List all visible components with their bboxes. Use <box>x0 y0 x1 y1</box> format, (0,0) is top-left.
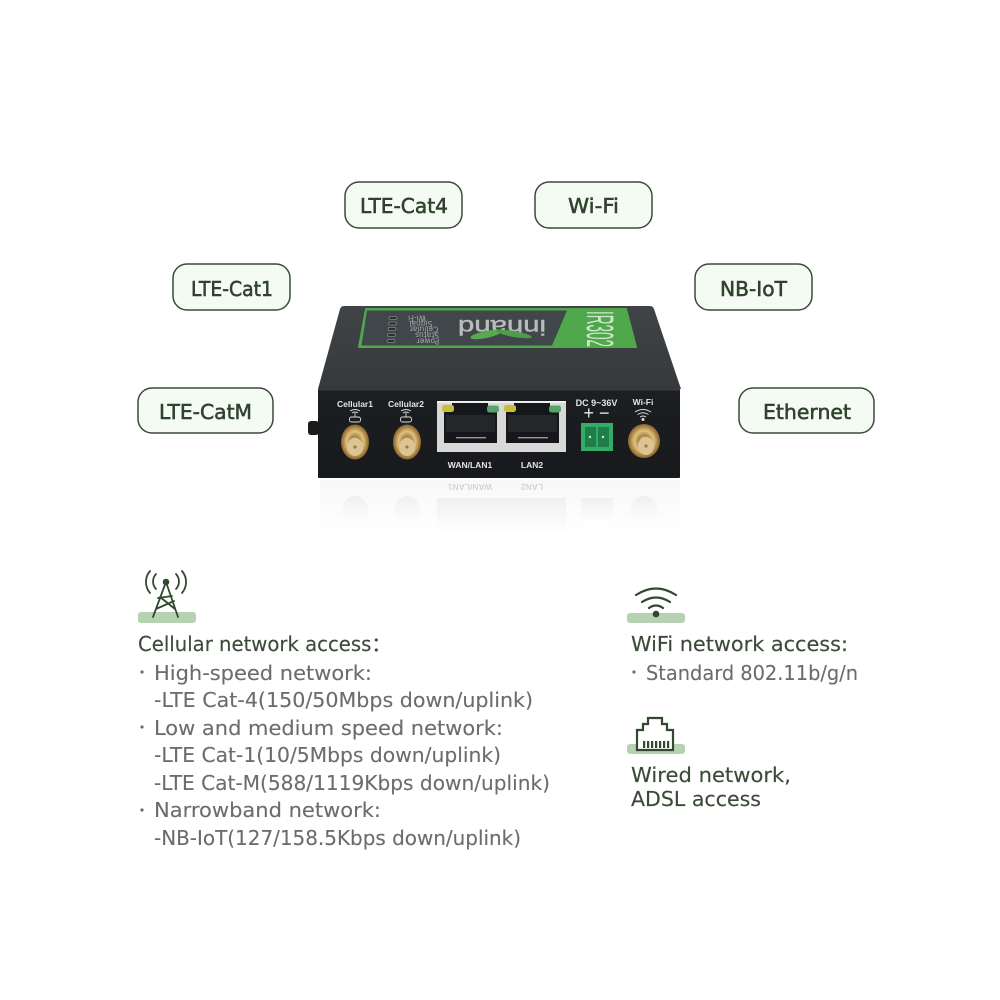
LED labels: Signal <box>409 319 433 328</box>
cellular 2 label: Cellular2 <box>388 399 424 409</box>
pill: Wi-Fi <box>535 182 652 228</box>
pill: LTE-Cat1: LTE-Cat1 <box>191 277 273 301</box>
cellular list: -LTE Cat-M(588/1119Kbps down/uplink) <box>154 771 550 795</box>
ethernet ports <box>437 401 566 452</box>
router reflection: LAN2 <box>521 482 543 492</box>
plus minus: + − <box>583 403 610 423</box>
router front face <box>318 389 680 478</box>
router reflection <box>320 480 680 535</box>
LED labels: Power <box>416 336 439 346</box>
status LEDs <box>387 316 397 342</box>
cellular list: High-speed network: <box>154 661 372 685</box>
pill: LTE-Cat4 <box>345 182 462 228</box>
pill: LTE-CatM <box>138 388 273 433</box>
pill: Ethernet: Ethernet <box>763 400 851 424</box>
pill: LTE-Cat1 <box>173 264 290 310</box>
port 2 <box>504 403 561 443</box>
cellular 1 label: Cellular1 <box>337 399 373 409</box>
cellular list: Low and medium speed network: <box>154 716 503 740</box>
heading: wired <box>631 763 791 811</box>
Wi-Fi label: Wi-Fi <box>633 397 653 407</box>
LAN2 label: LAN2 <box>521 460 543 470</box>
small wifi icon <box>635 410 651 420</box>
connector wifi <box>628 424 660 458</box>
power terminal <box>581 423 613 451</box>
cellular list: -LTE Cat-1(10/5Mbps down/uplink) <box>154 743 501 767</box>
router photo illustration <box>308 306 681 535</box>
router photo illustration: IR302 <box>578 311 620 347</box>
DC label: DC 9~36V <box>576 398 617 408</box>
icon: wifi <box>627 588 685 623</box>
heading: cellular: Cellular network access： <box>138 632 391 656</box>
pill: LTE-CatM: LTE-CatM <box>159 400 252 424</box>
side screw <box>308 421 319 435</box>
pill: Wi-Fi: Wi-Fi <box>568 194 619 218</box>
cellular list: Narrowband network: <box>154 798 381 822</box>
icon: ethernet <box>627 718 685 754</box>
port 1 <box>442 403 499 443</box>
router reflection: WAN/LAN1 <box>448 482 492 492</box>
pill: NB-IoT: NB-IoT <box>720 277 788 301</box>
LED labels: Cellular <box>409 324 438 334</box>
pill: Ethernet <box>739 388 874 433</box>
pill: NB-IoT <box>695 264 812 310</box>
LED labels: Wi-Fi <box>408 314 426 322</box>
connector 1 <box>341 424 369 460</box>
router top face <box>318 306 681 389</box>
wifi list: Standard 802.11b/g/n <box>646 661 858 685</box>
top label <box>359 309 636 347</box>
brand swirl <box>470 328 532 341</box>
heading: wifi: WiFi network access: <box>631 632 848 656</box>
connector 2 <box>393 424 421 460</box>
cellular list: -NB-IoT(127/158.5Kbps down/uplink) <box>154 826 521 850</box>
LED labels: Status <box>415 330 439 340</box>
WAN/LAN1 label: WAN/LAN1 <box>448 460 492 470</box>
heading: wired: Wired network, <box>631 763 791 787</box>
cellular list: -LTE Cat-4(150/50Mbps down/uplink) <box>154 688 533 712</box>
antenna icons <box>350 410 412 422</box>
LED labels <box>408 314 439 346</box>
heading: wired: ADSL access <box>631 787 761 811</box>
brand text: inhand <box>458 315 546 338</box>
pill: LTE-Cat4: LTE-Cat4 <box>360 194 448 218</box>
icon: cell tower <box>138 571 196 623</box>
cellular list <box>140 661 550 850</box>
